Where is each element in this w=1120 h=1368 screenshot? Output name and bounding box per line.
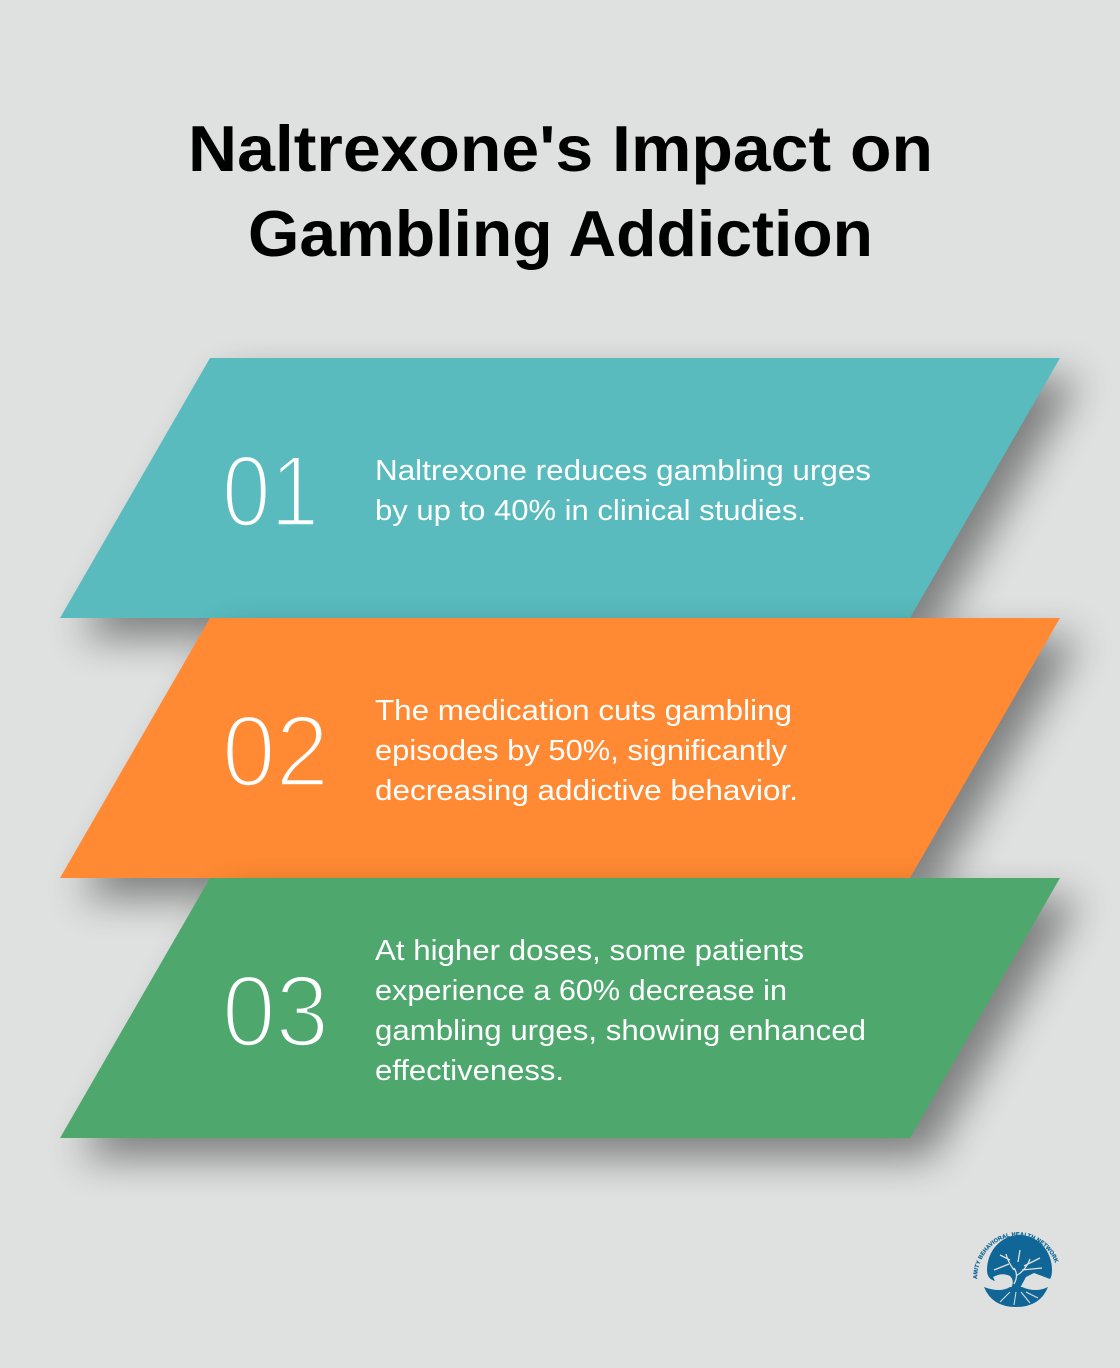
logo: Amity Behavioral Health Network [973,1232,1059,1307]
text: step 01: Naltrexone reduces gambling urges [375,455,871,487]
text: step 02: episodes by 50%, significantly [375,735,788,767]
green parallelogram [60,878,1060,1138]
panel: step 03 [60,878,1060,1138]
title: Gambling Addiction [248,197,873,270]
text: step 03: At higher doses, some patients [375,935,804,967]
title [188,112,933,270]
orange parallelogram [60,618,1060,878]
text: step 03 [375,935,866,1087]
teal parallelogram [60,358,1060,618]
text: step 02 [375,695,798,807]
number 01: 01 [222,436,319,548]
number 03: 03 [222,956,329,1068]
text: step 03: effectiveness. [375,1055,564,1087]
title: Naltrexone's Impact on [188,112,933,185]
icon: tree branches [994,1250,1042,1284]
icon: tree canopy [987,1235,1052,1288]
text: step 03: experience a 60% decrease in [375,975,787,1007]
text: step 01 [375,455,871,527]
panel: step 02 [60,618,1060,878]
panel: step 01 [60,358,1060,618]
number 02: 02 [222,696,329,808]
text: step 02: decreasing addictive behavior. [375,775,798,807]
text: step 01: by up to 40% in clinical studies. [375,495,806,527]
logo arc text: AMITY BEHAVIORAL HEALTH NETWORK [973,1232,1059,1279]
text: step 02: The medication cuts gambling [375,695,792,727]
text: step 03: gambling urges, showing enhanced [375,1015,866,1047]
icon: root lines [1000,1292,1038,1305]
icon: tree roots [984,1287,1048,1307]
